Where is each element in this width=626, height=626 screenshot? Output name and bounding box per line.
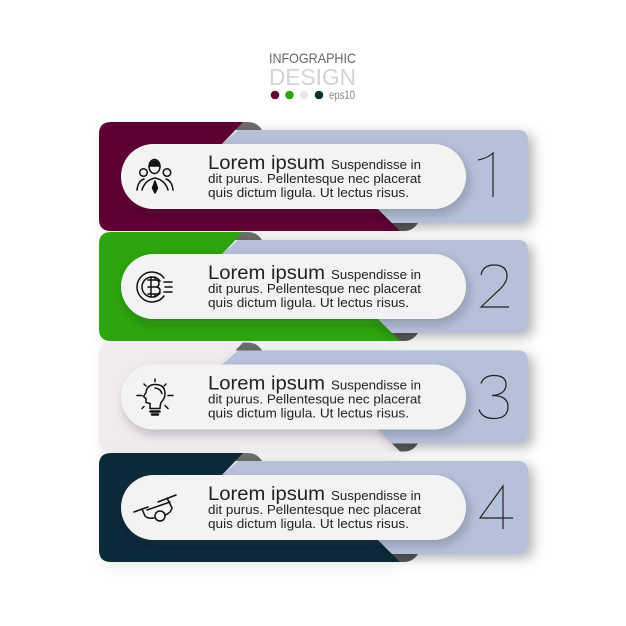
body text: Suspendisse in <box>331 268 421 282</box>
body text: dit purus. Pellentesque nec placerat <box>208 282 422 296</box>
blue card <box>222 240 528 333</box>
number <box>479 376 508 418</box>
icon: gears and levers <box>134 495 176 521</box>
base shape <box>99 122 400 231</box>
panel: step 1 <box>99 122 528 231</box>
pill <box>121 475 466 540</box>
icon: bitcoin <box>137 272 172 302</box>
grey top tab <box>230 453 262 461</box>
base shape <box>99 342 400 452</box>
eps label: eps10 <box>329 88 355 102</box>
body text <box>208 268 422 310</box>
pill <box>121 254 466 319</box>
heading: Lorem ipsum <box>208 153 325 174</box>
icon: team <box>137 160 173 193</box>
body text: dit purus. Pellentesque nec placerat <box>208 503 422 517</box>
panel: step 3 <box>99 342 528 452</box>
body text: quis dictum ligula. Ut lectus risus. <box>208 406 409 420</box>
colour dots <box>271 91 323 99</box>
base shape <box>99 453 400 562</box>
title: infographic: INFOGRAPHIC <box>269 50 356 66</box>
body text: Suspendisse in <box>331 158 421 172</box>
pill <box>121 364 466 430</box>
grey bottom tab <box>385 552 419 562</box>
body text: quis dictum ligula. Ut lectus risus. <box>208 296 409 310</box>
body text: dit purus. Pellentesque nec placerat <box>208 172 422 186</box>
grey top tab <box>230 342 262 350</box>
number <box>478 153 493 197</box>
blue card <box>222 350 528 444</box>
heading: Lorem ipsum <box>208 484 325 505</box>
title: design: DESIGN <box>269 64 356 90</box>
body text: quis dictum ligula. Ut lectus risus. <box>208 517 409 531</box>
number <box>481 265 509 307</box>
heading: Lorem ipsum <box>208 263 325 284</box>
grey top tab <box>230 232 262 240</box>
number <box>480 486 513 529</box>
body text: Suspendisse in <box>331 378 421 392</box>
body text: dit purus. Pellentesque nec placerat <box>208 392 422 406</box>
panel: step 2 <box>99 232 528 341</box>
body text <box>208 158 422 200</box>
icon: lightbulb head <box>137 379 173 414</box>
grey top tab <box>230 122 262 130</box>
heading: Lorem ipsum <box>208 374 325 394</box>
title block <box>269 50 356 102</box>
blue card <box>222 461 528 554</box>
base shape <box>99 232 400 341</box>
body text: Suspendisse in <box>331 489 421 503</box>
grey bottom tab <box>385 331 419 341</box>
blue card <box>222 130 528 223</box>
body text <box>208 378 422 420</box>
body text: quis dictum ligula. Ut lectus risus. <box>208 186 409 200</box>
grey bottom tab <box>385 442 419 452</box>
panel: step 4 <box>99 453 528 562</box>
pill <box>121 144 466 209</box>
body text <box>208 489 422 531</box>
grey bottom tab <box>385 221 419 231</box>
